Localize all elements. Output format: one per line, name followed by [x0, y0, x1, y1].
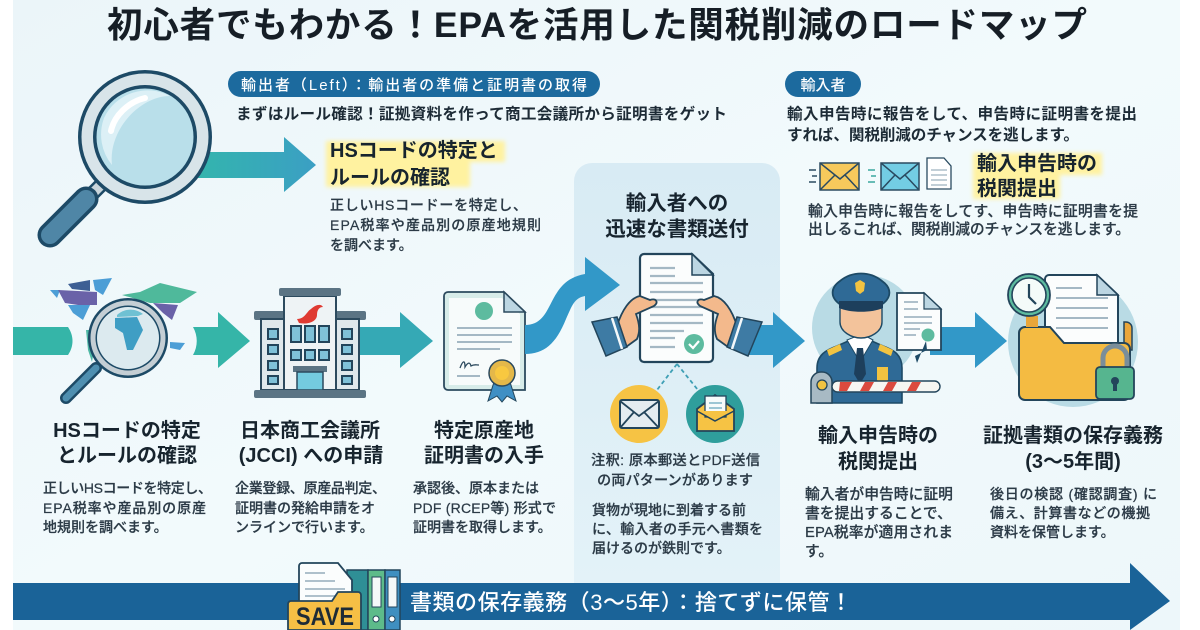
step: customs declaration text: す。: [805, 543, 833, 560]
text block: document sending note: 注釈: 原本郵送とPDF送信: [591, 452, 760, 469]
panel: express shipment column background: [574, 163, 780, 583]
step: HS code text: [43, 419, 212, 535]
importer label pill: 輸入者: [800, 77, 846, 94]
text block: HS code top: [326, 139, 541, 253]
text block: HS code top: EPA税率や産品別の原産地規則: [330, 217, 541, 233]
arrow: magnifier to HS step: [196, 137, 316, 192]
step: certificate acquisition text: [413, 419, 556, 535]
icon: document held by hands: [592, 254, 762, 390]
icon: large magnifying glass: [50, 70, 212, 235]
arrow: teal lead-in: [13, 327, 72, 355]
icon: certificate with ribbon: [444, 292, 525, 402]
text block: document sending note: 届けるのが鉄則です。: [592, 540, 731, 556]
exporter label pill: [228, 71, 600, 97]
yellow highlight: [326, 141, 505, 187]
step: JCCI application text: 企業登録、原産品判定、: [235, 480, 386, 496]
step: JCCI application text: 証明書の発給申請をオ: [235, 500, 375, 516]
heading: prompt document sending: [605, 192, 749, 241]
step: certificate acquisition text: PDF (RCEP等) 形式で: [413, 500, 556, 516]
step: record retention text: 後日の検認 (確認調査) に: [990, 486, 1157, 502]
icon: world map with magnifier: [50, 278, 197, 398]
arrow: curved certificate to documents: [525, 257, 620, 354]
step: JCCI application text: (JCCI) への申請: [239, 444, 383, 467]
step: record retention text: 証拠書類の保存義務: [983, 424, 1163, 447]
step: HS code text: HSコードの特定: [53, 419, 201, 442]
step: certificate acquisition text: 証明書を取得します。: [413, 519, 552, 535]
icon: PDF mail circle: [686, 385, 744, 443]
step: customs declaration text: 税関提出: [838, 450, 918, 473]
importer label pill: [785, 71, 861, 97]
step: customs declaration text: [805, 424, 953, 560]
step: record retention text: 資料を保管します。: [990, 524, 1115, 540]
step: customs declaration text: 書を提出することで、: [805, 505, 952, 522]
step: HS code text: 地規則を調べます。: [43, 519, 168, 535]
importer intro text: 輸入申告時に報告をして、申告時に証明書を提出: [787, 104, 1137, 123]
importer intro text: すれば、関税削減のチャンスを逃します。: [787, 126, 1079, 144]
text block: document sending note: [591, 452, 763, 556]
step: record retention text: (3〜5年間): [1025, 450, 1121, 473]
step: HS code text: 正しいHSコードを特定し、: [43, 480, 212, 496]
icon: SAVE folder and binders: [288, 563, 400, 630]
arrow: bottom retention banner: [13, 563, 1170, 630]
text block: customs declaration top: 出しるこれば、関税削減のチャンスを逃します。: [808, 221, 1130, 238]
text block: document sending note: の両パターンがあります: [597, 472, 753, 489]
text block: customs declaration top: [808, 152, 1138, 238]
icon: locked folder with clock: [1008, 274, 1138, 407]
arrow: documents to customs: [745, 312, 805, 368]
step: HS code text: EPA税率や産品別の原産: [43, 500, 206, 516]
step: JCCI application text: 日本商工会議所: [240, 419, 380, 442]
arrow: customs to storage: [930, 312, 1007, 368]
heading: prompt document sending: 迅速な書類送付: [605, 218, 749, 241]
arrow: bottom retention banner: 書類の保存義務（3〜5年）：捨てずに保管！: [410, 590, 852, 615]
step: JCCI application text: [235, 419, 386, 535]
arrow: HS step to JCCI: [193, 312, 250, 368]
step: customs declaration text: EPA税率が適用されま: [805, 523, 953, 541]
yellow highlight: [973, 153, 1102, 199]
icon: postal mail circle: [610, 385, 668, 443]
text block: customs declaration top: 輸入申告時の: [977, 152, 1097, 175]
text block: customs declaration top: 税関提出: [977, 177, 1057, 200]
text block: HS code top: ルールの確認: [330, 166, 450, 189]
text block: HS code top: を調べます。: [330, 237, 413, 253]
title: 初心者でもわかる！EPAを活用した関税削減のロードマップ: [107, 5, 1087, 45]
icon: chamber of commerce building: [254, 288, 366, 398]
step: record retention text: [983, 424, 1163, 540]
step: certificate acquisition text: 証明書の入手: [424, 444, 544, 467]
arrow: JCCI to certificate: [360, 312, 433, 368]
icon: mail and document row: [809, 158, 951, 190]
step: certificate acquisition text: 承認後、原本または: [413, 480, 539, 496]
text block: document sending note: 貨物が現地に到着する前: [592, 502, 746, 518]
step: certificate acquisition text: 特定原産地: [434, 419, 534, 442]
importer intro text: [787, 104, 1137, 144]
exporter label pill: 輸出者（Left）：輸出者の準備と証明書の取得: [241, 77, 587, 94]
step: record retention text: 備え、計算書などの機拠: [990, 505, 1150, 521]
text block: HS code top: HSコードの特定と: [330, 139, 498, 162]
step: HS code text: とルールの確認: [57, 444, 197, 467]
text block: document sending note: に、輸入者の手元へ書類を: [592, 521, 763, 537]
step: customs declaration text: 輸入申告時の: [818, 424, 938, 447]
icon: customs officer at barrier: [811, 274, 941, 403]
step: JCCI application text: ンラインで行います。: [235, 519, 374, 535]
text block: customs declaration top: 輸入申告時に報告をしてす、申告時に証明書を提: [808, 203, 1138, 220]
text block: HS code top: 正しいHSコードーを特定し、: [330, 197, 527, 213]
exporter subtitle: まずはルール確認！証拠資料を作って商工会議所から証明書をゲット: [236, 104, 727, 123]
step: customs declaration text: 輸入者が申告時に証明: [805, 485, 953, 503]
heading: prompt document sending: 輸入者への: [626, 192, 728, 215]
